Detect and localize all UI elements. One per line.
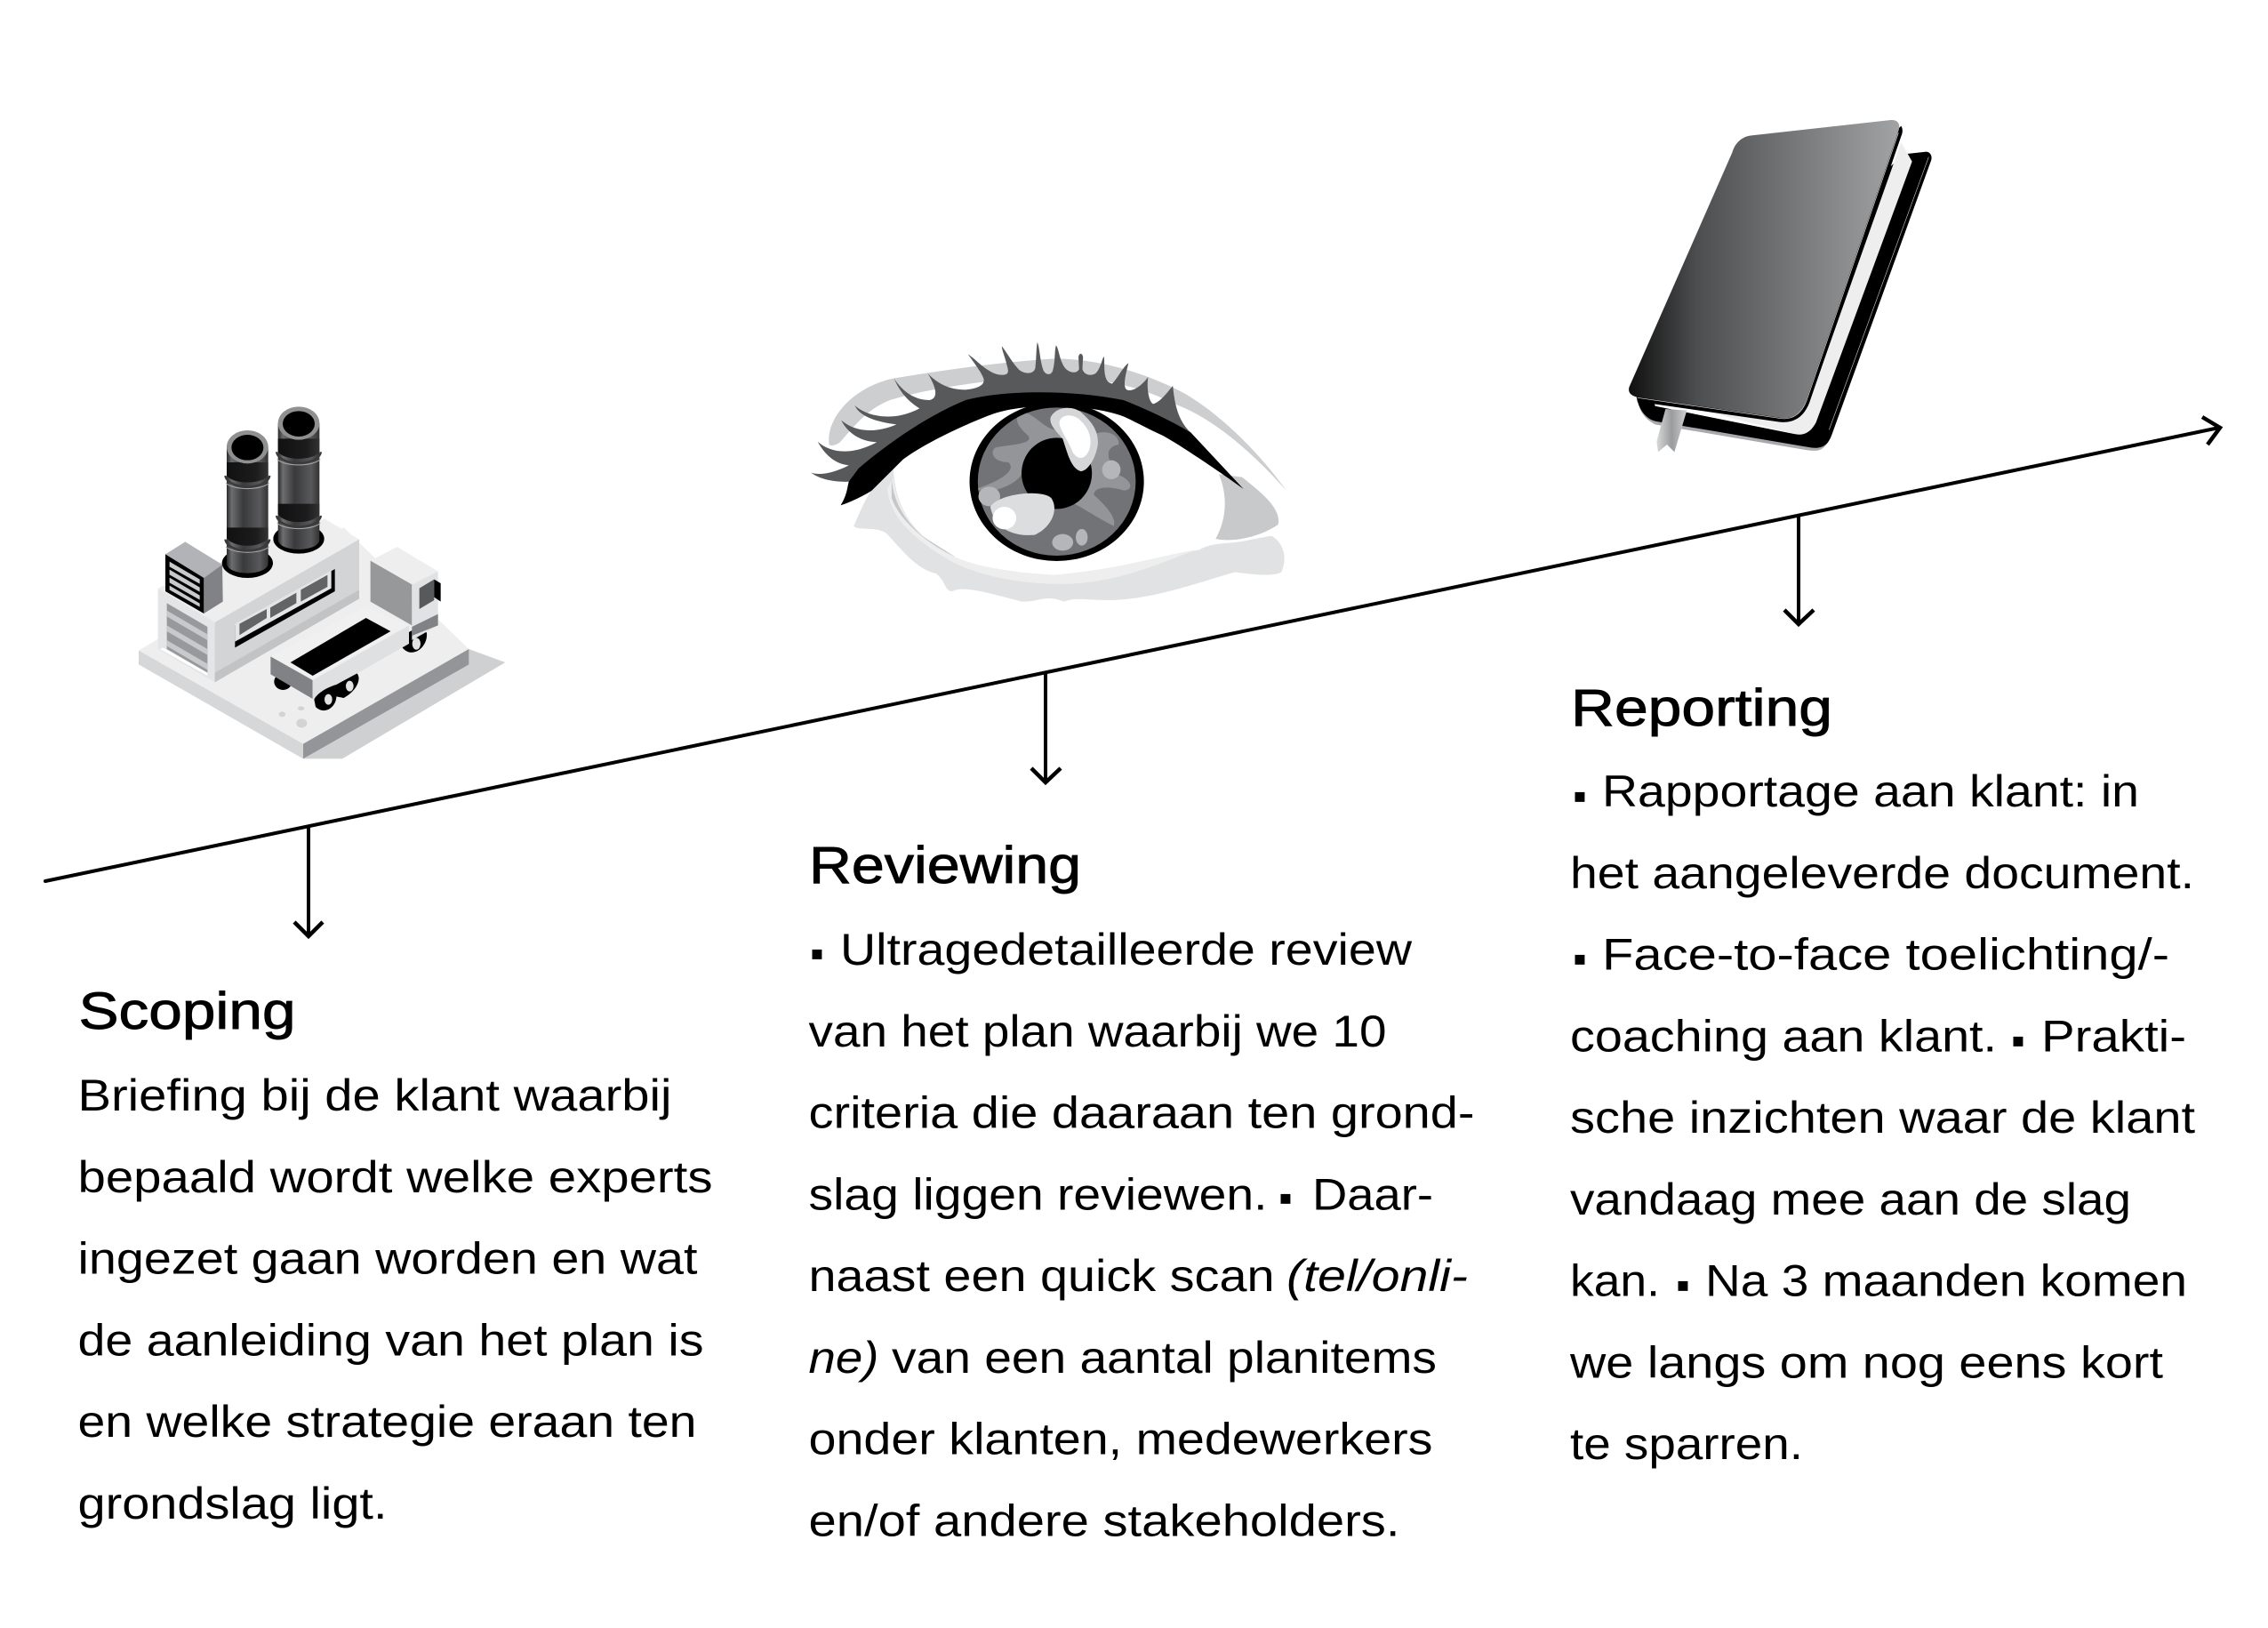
- text block: Reporting description: ▪: [1574, 948, 1586, 970]
- text block: Reviewing description: slag liggen reviewen.: [809, 1169, 1268, 1219]
- text block: Reviewing description: onder klanten, medewerkers: [809, 1414, 1433, 1464]
- arrow: reporting: [1784, 515, 1814, 625]
- text block: Reviewing description: Ultragedetailleerde review: [840, 925, 1413, 974]
- icon: factory with truck: [139, 406, 505, 758]
- eyelashes: [811, 342, 1191, 482]
- text block: Reviewing description: en/of andere stakeholders.: [809, 1496, 1399, 1545]
- text block: Reporting description: vandaag mee aan de slag: [1570, 1175, 2131, 1224]
- text block: Reviewing description: criteria die daaraan ten grond-: [809, 1088, 1474, 1138]
- text block: Scoping description: [78, 1071, 713, 1528]
- text block: Reporting description: Rapportage aan klant: in: [1602, 766, 2139, 816]
- chimney right: [273, 406, 325, 554]
- text block: Reporting description: coaching aan klant.: [1570, 1011, 1997, 1061]
- heading: Reporting: Reporting: [1571, 679, 1832, 737]
- text block: Scoping description: grondslag ligt.: [78, 1479, 388, 1528]
- arrow: scoping: [294, 827, 323, 937]
- text block: Reviewing description: Daar-: [1312, 1169, 1433, 1219]
- text block: Reviewing description: van een aantal planitems: [892, 1333, 1437, 1383]
- text block: Reviewing description: naast een quick scan: [809, 1251, 1275, 1301]
- chimney left: [222, 430, 273, 578]
- upper eyelid: [841, 392, 1244, 505]
- text block: Reporting description: kan.: [1570, 1255, 1660, 1305]
- heading: Scoping: Scoping: [78, 982, 295, 1040]
- text block: Reporting description: te sparren.: [1570, 1419, 1803, 1469]
- text block: Scoping description: bepaald wordt welke experts: [78, 1152, 713, 1202]
- text block: Reviewing description: ▪: [811, 942, 823, 965]
- text block: Reporting description: Face-to-face toelichting/-: [1602, 930, 2169, 980]
- text block: Scoping description: Briefing bij de klant waarbij: [78, 1071, 672, 1120]
- arrow: reviewing: [1031, 672, 1061, 783]
- text block: Reporting description: ▪: [2011, 1030, 2024, 1052]
- text block: Reviewing description: [809, 925, 1474, 1545]
- text block: Reviewing description: ▪: [1278, 1187, 1292, 1209]
- text block: Reporting description: sche inzichten waar de klant: [1570, 1093, 2195, 1143]
- text block: Reporting description: Prakti-: [2041, 1011, 2186, 1061]
- text block: Scoping description: de aanleiding van het plan is: [78, 1315, 704, 1365]
- text block: Reviewing description: van het plan waarbij we 10: [809, 1006, 1387, 1056]
- text block: Reporting description: het aangeleverde document.: [1570, 848, 2194, 898]
- text block: Scoping description: ingezet gaan worden en wat: [78, 1234, 698, 1284]
- heading: Reviewing: Reviewing: [809, 837, 1081, 894]
- icon: book: [1629, 120, 1932, 452]
- icon: eye: [811, 342, 1286, 602]
- timeline axis arrow: [45, 417, 2220, 881]
- text block: Scoping description: en welke strategie eraan ten: [78, 1397, 697, 1447]
- text block: Reporting description: [1569, 766, 2195, 1469]
- text block: Reporting description: Na 3 maanden komen: [1705, 1255, 2187, 1305]
- text block: Reviewing description: ne): [809, 1333, 878, 1383]
- iris: [970, 402, 1144, 561]
- text block: Reporting description: we langs om nog eens kort: [1569, 1337, 2163, 1387]
- text block: Reporting description: ▪: [1677, 1274, 1689, 1296]
- panel: Scoping: [78, 982, 713, 1528]
- text block: Reviewing description: (tel/onli-: [1286, 1251, 1468, 1301]
- text block: Reporting description: ▪: [1574, 785, 1586, 807]
- panel: Reviewing: [809, 837, 1474, 1545]
- bookmark: [1656, 409, 1687, 452]
- truck: [270, 547, 441, 710]
- panel: Reporting: [1569, 679, 2195, 1469]
